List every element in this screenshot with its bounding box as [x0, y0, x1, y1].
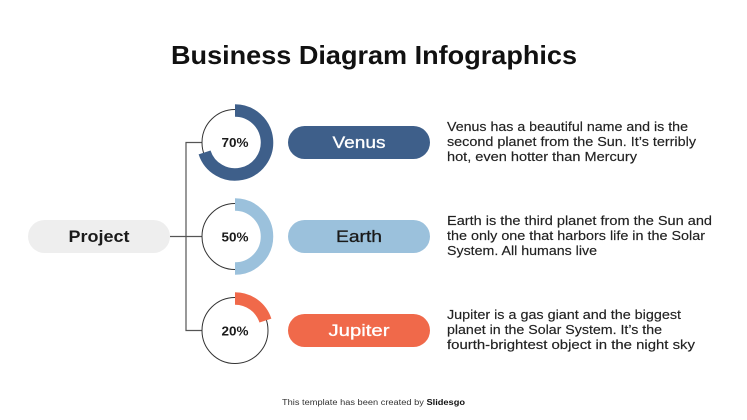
description: venus: hot, even hotter than Mercury — [447, 150, 638, 164]
footer credit: This template has been created by Slidesgo — [282, 398, 465, 407]
description: earth: System. All humans live — [447, 244, 597, 258]
description: jupiter — [447, 308, 696, 352]
description: jupiter: planet in the Solar System. It’s the — [447, 323, 662, 337]
description: jupiter: Jupiter is a gas giant and the biggest — [447, 308, 682, 322]
description: venus: second planet from the Sun. It’s terribly — [447, 135, 697, 149]
label: jupiter — [288, 314, 430, 347]
label: venus: Venus — [332, 133, 386, 152]
donut: earth 50% — [202, 204, 268, 270]
donut: jupiter 20%: 20% — [222, 324, 248, 338]
label: earth — [288, 220, 430, 253]
label: jupiter: Jupiter — [328, 321, 390, 340]
description: earth: Earth is the third planet from the Sun and — [447, 214, 712, 228]
node: project: Project — [68, 227, 130, 246]
donut: venus 70% — [202, 110, 268, 176]
node: project — [28, 220, 170, 253]
description: earth: the only one that harbors life in the Solar — [447, 229, 705, 243]
donut: jupiter 20% — [202, 298, 268, 364]
label: earth: Earth — [336, 227, 382, 246]
description: jupiter: fourth-brightest object in the night sky — [447, 338, 696, 352]
donut: venus 70%: 70% — [222, 136, 248, 150]
donut: earth 50%: 50% — [222, 230, 248, 244]
description: venus — [447, 120, 697, 164]
connector lines — [170, 142, 202, 330]
description: venus: Venus has a beautiful name and is the — [447, 120, 688, 134]
label: venus — [288, 126, 430, 159]
description: earth — [447, 214, 712, 258]
title: Business Diagram Infographics — [171, 40, 577, 70]
